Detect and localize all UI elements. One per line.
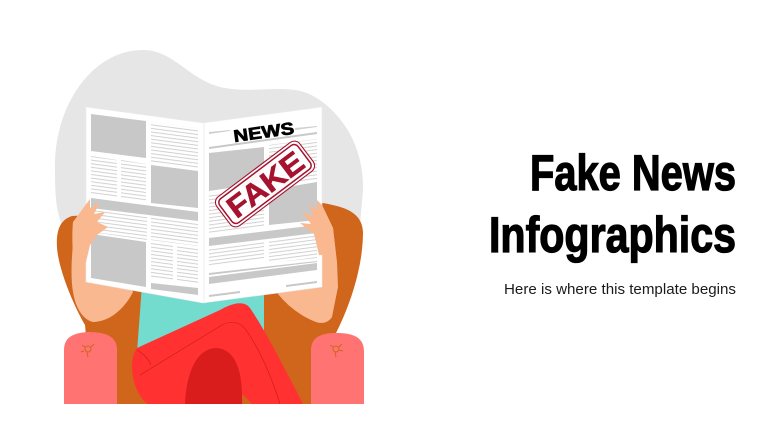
- newspaper pages: [86, 107, 322, 303]
- dark red knee shadow: [185, 348, 242, 404]
- icon: left armrest button: [81, 344, 94, 357]
- subtitle: Here is where this template begins: [504, 282, 736, 298]
- torso: [137, 285, 264, 352]
- left page content: [91, 114, 198, 295]
- right hand: [300, 200, 336, 255]
- stamp: FAKE: FAKE: [221, 146, 311, 225]
- red legs: [132, 303, 303, 404]
- trouser seams: [137, 322, 280, 404]
- left arm: [72, 225, 133, 322]
- fold line: [203, 123, 205, 303]
- title: Infographics: [489, 207, 736, 263]
- newspaper: [86, 107, 322, 303]
- stamp: FAKE: [213, 138, 317, 230]
- title: Fake News: [530, 145, 736, 201]
- right arm: [275, 205, 338, 323]
- illustration: person reading newspaper: [57, 107, 364, 404]
- title: [489, 145, 736, 263]
- armchair back: [57, 203, 363, 404]
- left armrest: [64, 332, 117, 404]
- left hand: [72, 199, 108, 262]
- icon: right armrest button: [330, 344, 343, 357]
- background blob: [55, 50, 363, 225]
- right page content: [209, 126, 317, 297]
- masthead: NEWS: NEWS: [232, 119, 295, 146]
- right armrest: [311, 333, 364, 404]
